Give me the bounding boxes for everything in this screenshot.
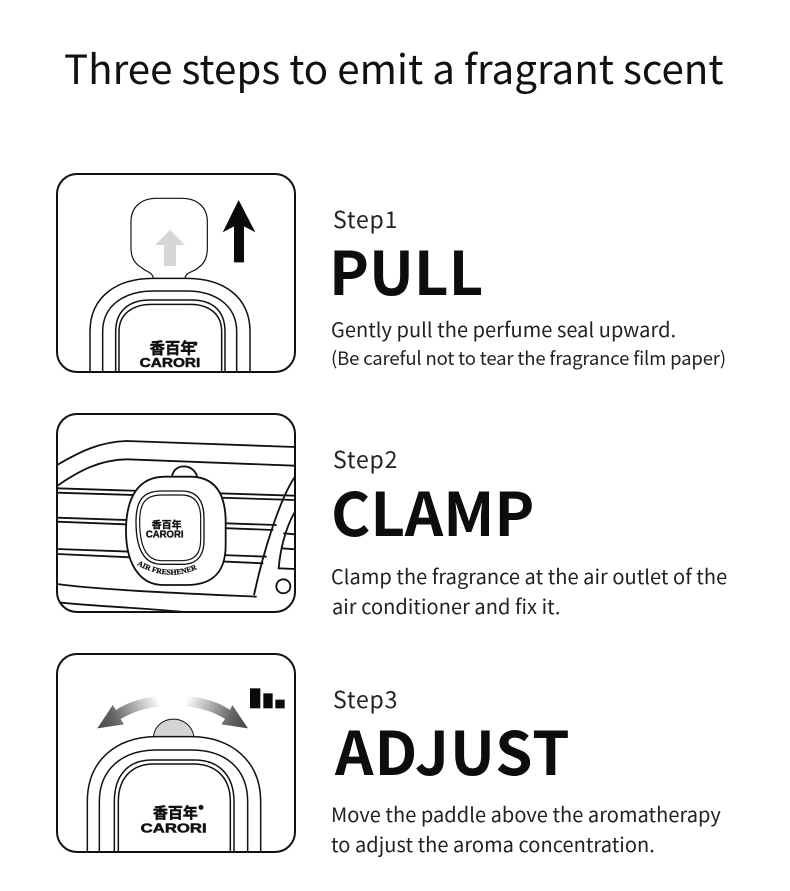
logo: CARORI (141, 820, 207, 835)
step 2 description line 2: air conditioner and fix it. (332, 591, 560, 620)
step 2 label: Step2 (333, 441, 398, 475)
panel: step 2 illustration (56, 413, 296, 613)
logo: 香百年 (152, 517, 182, 532)
logo (141, 802, 207, 835)
freshener body (90, 278, 250, 373)
freshener body (126, 477, 226, 585)
panel: step 1 illustration (56, 173, 296, 373)
icon: right curved arrow (186, 696, 248, 728)
paddle (153, 719, 194, 737)
icon: concentration bars (250, 688, 285, 708)
step 1 note: (Be careful not to tear the fragrance film paper) (331, 345, 726, 371)
icon: left curved arrow (97, 696, 160, 728)
freshener body (87, 737, 261, 853)
step 2 description: Clamp the fragrance at the air outlet of the (331, 561, 727, 590)
step 3 label: Step3 (333, 681, 398, 715)
step 1 label: Step1 (333, 201, 398, 235)
logo (146, 517, 184, 540)
perfume seal (131, 198, 207, 278)
logo: 香百年 (150, 337, 196, 359)
step 2 heading: CLAMP (331, 467, 534, 554)
dashboard edge (254, 477, 295, 595)
icon: black up arrow (223, 200, 255, 262)
step 3 heading: ADJUST (335, 706, 571, 793)
step 1 heading: PULL (329, 226, 483, 313)
title: Three steps to emit a fragrant scent (64, 37, 724, 96)
step 1 description: Gently pull the perfume seal upward. (331, 314, 676, 343)
logo (140, 337, 200, 370)
logo: CARORI (146, 529, 184, 540)
panel: step 3 illustration (56, 653, 296, 853)
air freshener label: AIR FRESHENER (136, 561, 198, 575)
logo: CARORI (140, 355, 200, 370)
logo: 香百年 (153, 802, 198, 823)
air vent slats (57, 441, 295, 612)
paddle (171, 466, 198, 476)
step 3 description line 2: to adjust the aroma concentration. (331, 829, 655, 858)
step 3 description: Move the paddle above the aromatherapy (331, 799, 721, 828)
icon: grey arrow (155, 230, 185, 266)
